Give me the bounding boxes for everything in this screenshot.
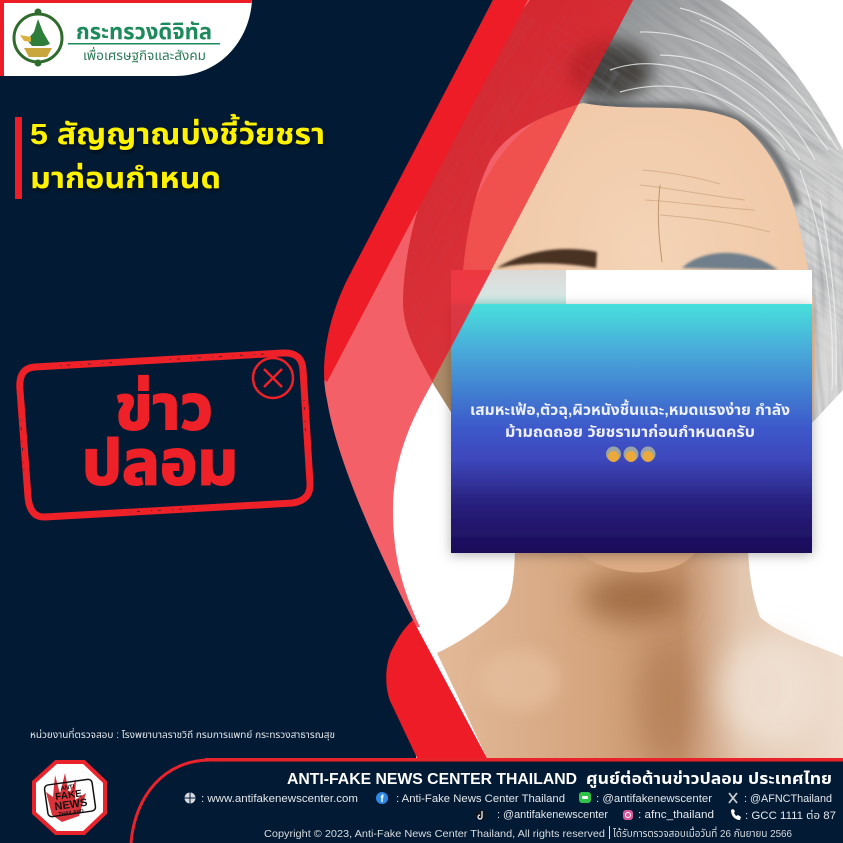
copyright	[264, 826, 792, 840]
eyebrow left	[497, 249, 597, 268]
sideburn skin	[432, 345, 451, 412]
neck and shoulders	[437, 540, 843, 762]
icon: ministry emblem	[14, 8, 62, 66]
footer headline: ศูนย์ต่อต้านข่าวปลอม ประเทศไทย	[586, 770, 832, 789]
icon: x	[729, 793, 737, 803]
red corner shape	[386, 620, 488, 760]
title: มาก่อนกำหนด	[30, 163, 221, 195]
blurred header patch	[451, 270, 566, 304]
contact row two: : GCC 1111 ต่อ 87	[745, 809, 836, 822]
source note: หน่วยงานที่ตรวจสอบ : โรงพยาบาลราชวิถี กรมการแพทย์ กระทรวงสาธารณสุข	[30, 727, 335, 741]
badge: anti fake news: ANTI	[60, 784, 75, 792]
icon: x in circle	[253, 358, 293, 398]
title: 5 สัญญาณบ่งชี้วัยชรา	[30, 113, 325, 151]
ministry logo panel	[0, 0, 252, 76]
face	[432, 95, 822, 540]
title	[15, 113, 325, 199]
eyebrow right	[682, 253, 778, 270]
contact row one: : @AFNCThailand	[744, 793, 832, 805]
icon: line	[579, 792, 591, 803]
message text	[470, 399, 790, 441]
badge: anti fake news: FAKE	[55, 788, 83, 803]
grey hair	[403, 0, 843, 423]
icon: phone	[731, 809, 741, 820]
translucent red band	[300, 0, 633, 627]
icon: globe	[184, 792, 196, 804]
red tint over box corner	[451, 270, 492, 348]
forehead wrinkles	[640, 170, 770, 262]
stamp text: ปลอม	[82, 429, 238, 498]
icon: facebook	[376, 792, 388, 805]
message text: เสมหะเฟ้อ,ตัวฉุ,ผิวหนังชื้นแฉะ,หมดแรงง่าย กำลัง	[470, 399, 790, 419]
footer headline: ANTI-FAKE NEWS CENTER THAILAND	[287, 771, 577, 788]
stamp: fake news	[20, 353, 310, 517]
stamp text: ข่าว	[115, 374, 213, 443]
icon: facebook: f	[380, 794, 384, 805]
contact row one	[184, 792, 832, 805]
contact row two	[476, 809, 836, 822]
contact row two: : @antifakenewscenter	[497, 809, 608, 821]
gradient message panel	[451, 304, 812, 553]
white header bar	[451, 270, 812, 304]
badge: anti fake news	[34, 762, 105, 833]
photo: elderly woman	[403, 0, 843, 758]
footer	[0, 759, 843, 843]
badge: anti fake news: NEWS	[54, 797, 88, 813]
message text: ม้ามถดถอย วัยชรามาก่อนกำหนดครับ	[505, 423, 755, 441]
icon: instagram	[623, 810, 633, 820]
message screenshot box	[451, 270, 812, 553]
ministry tagline: เพื่อเศรษฐกิจและสังคม	[83, 46, 206, 63]
footer headline	[287, 770, 832, 789]
contact row one: : www.antifakenewscenter.com	[201, 793, 358, 805]
solid red band	[300, 0, 528, 382]
copyright: ได้รับการตรวจสอบเมื่อวันที่ 26 กันยายน 2566	[612, 826, 792, 840]
contact row two: : afnc_thailand	[638, 809, 714, 821]
icon: tiktok	[476, 810, 486, 820]
stamp text	[82, 374, 238, 498]
contact row one: : Anti-Fake News Center Thailand	[396, 793, 565, 805]
contact row one: : @antifakenewscenter	[596, 793, 712, 805]
ministry name: กระทรวงดิจิทัล	[76, 19, 212, 44]
navy background panel	[0, 0, 493, 843]
icons: three elderly faces	[606, 446, 656, 462]
badge: anti fake news: THAILAND	[58, 808, 85, 818]
copyright: Copyright © 2023, Anti-Fake News Center Thailand, All rights reserved	[264, 828, 605, 840]
stamp wear marks	[20, 354, 306, 512]
